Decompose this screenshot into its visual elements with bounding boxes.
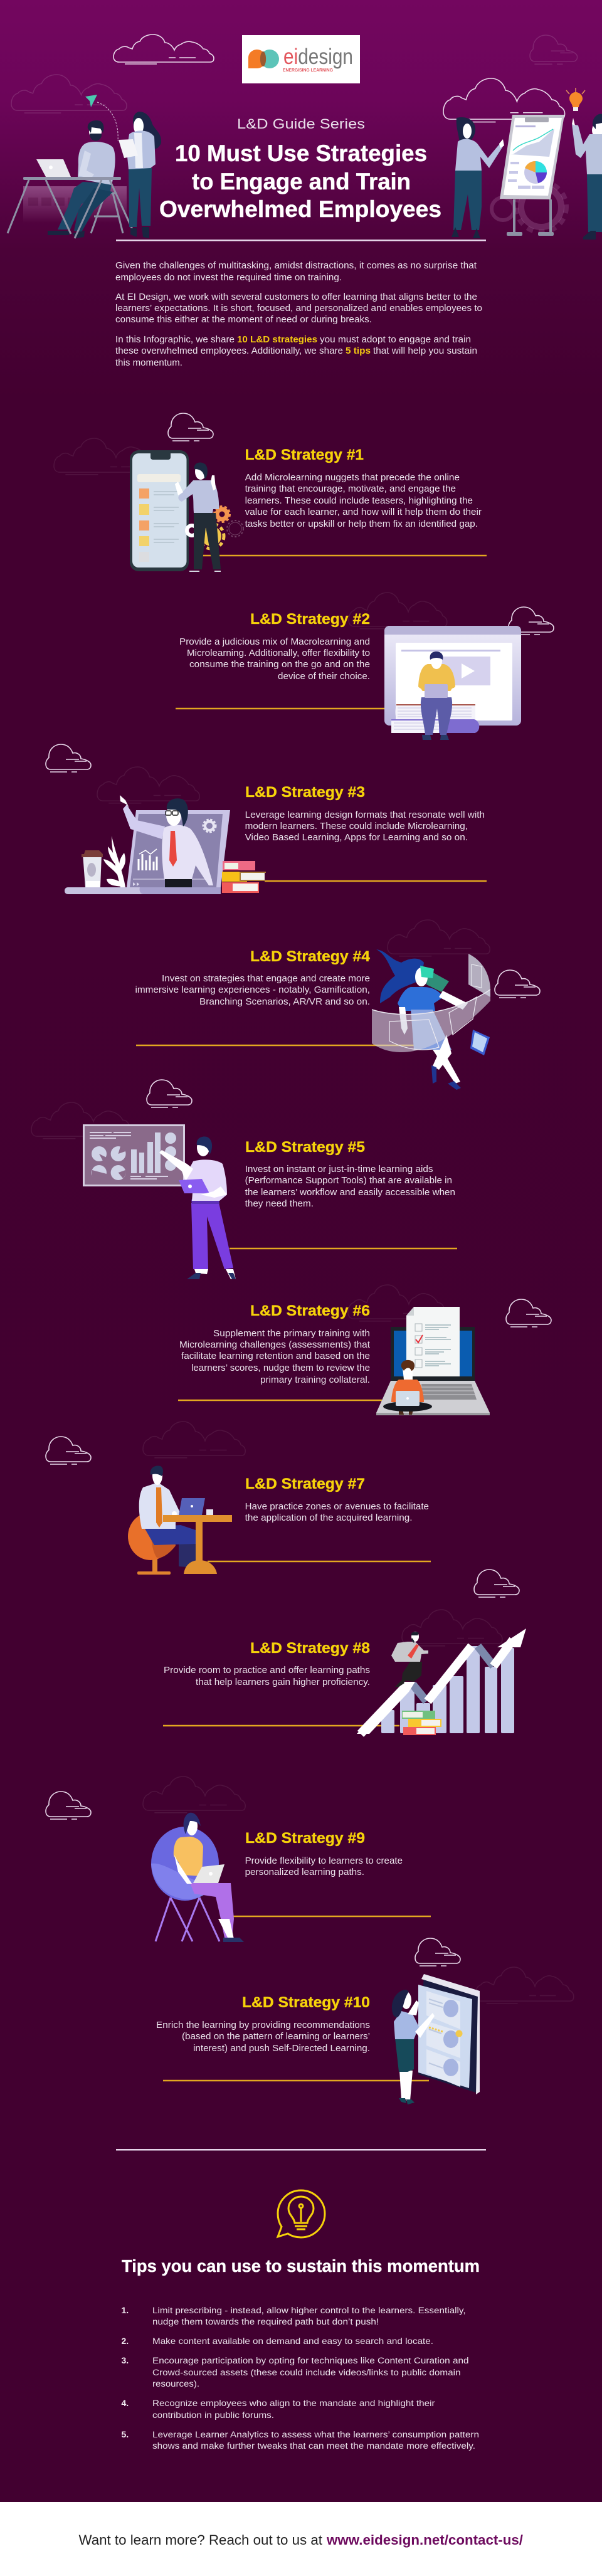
tip 1: 1.	[122, 2305, 129, 2315]
panel: strategy 7	[46, 1422, 431, 1575]
body text: interest) and push Self-Directed Learning.	[193, 2044, 370, 2054]
body text: Invest on strategies that engage and create more	[162, 974, 370, 984]
tip 5: shows and make further tweaks that can meet the mandate more effectively.	[152, 2441, 475, 2451]
panel: strategy 2	[176, 593, 554, 740]
title	[159, 140, 441, 222]
body text: (Performance Support Tools) that are available in	[245, 1176, 452, 1186]
tip 5: Leverage Learner Analytics to assess what the learners’ consumption pattern	[152, 2430, 479, 2439]
clouds	[54, 413, 213, 475]
footer text: www.eidesign.net/contact-us/	[326, 2532, 523, 2548]
heading: L&D Strategy #4	[250, 948, 371, 965]
footer text: Want to learn more? Reach out to us at	[79, 2532, 322, 2548]
body text: device of their choice.	[278, 672, 370, 682]
clouds	[31, 1080, 192, 1139]
tip 5: 5.	[122, 2429, 129, 2439]
intro text: 10 L&D strategies	[237, 335, 317, 345]
tip 5	[122, 2429, 479, 2451]
body text: that help learners gain higher proficiency.	[196, 1677, 370, 1687]
body text: they need them.	[245, 1199, 314, 1209]
panel: strategy 1	[54, 413, 487, 572]
tip 4: Recognize employees who align to the mandate and highlight their	[152, 2399, 435, 2408]
body text: Leverage learning design formats that resonate well with	[245, 810, 485, 820]
title: to Engage and Train	[192, 169, 411, 194]
body text	[179, 637, 370, 682]
body text: Provide room to practice and offer learning paths	[164, 1665, 370, 1676]
body text: Microlearning. Additionally, offer flexibility to	[187, 648, 370, 658]
tip 3	[122, 2355, 469, 2389]
panel: strategy 10	[156, 1938, 574, 2104]
intro text: In this Infographic, we share	[115, 335, 235, 345]
title: Overwhelmed Employees	[159, 196, 441, 222]
tip 2: Make content available on demand and easy to search and locate.	[152, 2336, 433, 2346]
illustration: man and woman at desk	[8, 95, 161, 238]
panel: strategy 8	[163, 1570, 526, 1735]
heading: L&D Strategy #6	[250, 1302, 370, 1319]
body text	[156, 2020, 370, 2054]
tip 1	[122, 2305, 466, 2326]
body text	[164, 1665, 370, 1687]
body text: tasks better or upskill or help them fix an identified gap.	[245, 519, 478, 529]
illustration: window with man on books	[384, 626, 521, 740]
illustration: man at table	[128, 1466, 232, 1575]
heading: L&D Strategy #2	[250, 611, 370, 628]
tip 1: Limit prescribing - instead, allow higher control to the learners. Essentially,	[152, 2306, 466, 2315]
body text: consume the training on the go and on the	[189, 660, 370, 670]
heading: L&D Strategy #3	[245, 784, 365, 801]
body text: Invest on instant or just-in-time learning aids	[245, 1164, 433, 1175]
heading: L&D Strategy #7	[245, 1475, 365, 1492]
heading: Tips you can use to sustain this momentum	[122, 2256, 480, 2276]
cloud: faded left	[11, 75, 127, 113]
tip 3: Crowd-sourced assets (these could include videos/links to public domain	[152, 2368, 461, 2377]
body text: learners. These could include teasers, highlighting the	[245, 496, 473, 506]
icon: light bulb speech bubble	[278, 2190, 325, 2237]
footer band	[0, 2502, 602, 2576]
body text	[245, 1164, 455, 1209]
intro text: learners’ expectations. It is short, focused, and personalized and enables employees to	[115, 304, 482, 314]
tip 3: resources).	[152, 2379, 199, 2389]
cloud: right	[443, 78, 565, 122]
intro text: that will help you sustain	[373, 346, 477, 356]
body text: value for each learner, and how will it help them do their	[245, 507, 482, 517]
body text	[245, 1856, 403, 1877]
heading: L&D Strategy #9	[245, 1830, 365, 1847]
intro text: you must adopt to engage and train	[320, 335, 471, 345]
body text: Add Microlearning nuggets that precede the online	[245, 473, 460, 483]
body text: facilitate learning retention and based on the	[181, 1351, 370, 1361]
body text: training that encourage, motivate, and engage the	[245, 484, 456, 494]
body text: Have practice zones or avenues to facilitate	[245, 1502, 429, 1512]
body text: the learners’ workflow and easily accessible when	[245, 1188, 455, 1198]
tip 4: 4.	[122, 2398, 129, 2408]
body text: Provide a judicious mix of Macrolearning and	[179, 637, 370, 647]
clouds	[46, 1776, 245, 1819]
logo: eidesign	[283, 45, 353, 69]
body text	[135, 974, 370, 1007]
panel: strategy 5	[31, 1080, 457, 1279]
intro text: this momentum.	[115, 358, 182, 368]
clouds	[388, 920, 540, 998]
title: 10 Must Use Strategies	[175, 140, 427, 166]
subtitle: L&D Guide Series	[237, 116, 365, 132]
intro text: At EI Design, we work with several customers to offer learning that aligns better to the	[115, 292, 477, 302]
panel: strategy 9	[46, 1776, 431, 1942]
intro text: 5 tips	[346, 346, 371, 356]
intro text	[115, 261, 482, 368]
body text: personalized learning paths.	[245, 1867, 364, 1877]
tip 2: 2.	[122, 2336, 129, 2346]
heading: L&D Strategy #1	[245, 446, 364, 463]
clouds	[348, 1285, 551, 1327]
body text	[245, 473, 482, 529]
illustration: woman in VR	[372, 949, 490, 1090]
tip 3: Encourage participation by opting for techniques like Content Curation and	[152, 2356, 469, 2365]
heading: L&D Strategy #5	[245, 1139, 365, 1156]
body text	[245, 810, 485, 843]
illustration: woman in chair	[151, 1813, 244, 1942]
body text	[179, 1329, 370, 1385]
body text: immersive learning experiences - notably, Gamification,	[135, 985, 370, 995]
header panel	[8, 34, 602, 241]
clouds	[402, 1570, 519, 1646]
illustration: growth chart and runner	[357, 1628, 526, 1735]
logo: ENERGISING LEARNING	[283, 67, 333, 73]
panel: strategy 4	[135, 920, 540, 1090]
illustration: flipchart presentation	[452, 88, 602, 240]
body text: Enrich the learning by providing recommendations	[156, 2020, 370, 2030]
panel: strategy 6	[178, 1285, 551, 1415]
body text: Provide flexibility to learners to create	[245, 1856, 403, 1866]
clouds	[46, 1422, 245, 1464]
body text: primary training collateral.	[260, 1375, 370, 1385]
illustration: dashboard and man	[84, 1125, 236, 1279]
intro text: consume this either at the moment of need or during breaks.	[115, 315, 372, 325]
clouds	[415, 1938, 574, 2003]
illustration: man in laptop	[65, 795, 266, 894]
footer text	[79, 2532, 523, 2548]
body text: learners’ scores, nudge them to review the	[191, 1363, 370, 1373]
body text: Branching Scenarios, AR/VR and so on.	[199, 997, 370, 1007]
body text: (based on the pattern of learning or learners’	[182, 2032, 370, 2042]
body text: Microlearning challenges (assessments) that	[179, 1340, 370, 1350]
cloud: faded right	[530, 35, 578, 64]
body text: Supplement the primary training with	[213, 1329, 370, 1339]
logo	[242, 35, 360, 83]
panel: strategy 3	[46, 744, 487, 894]
body text: modern learners. These could include Microlearning,	[245, 821, 468, 831]
tip 1: nudge them towards the required path but don’t push!	[152, 2317, 379, 2326]
tip 4	[122, 2398, 435, 2420]
tip 3: 3.	[122, 2355, 129, 2365]
panel: tips	[122, 2190, 480, 2451]
illustration: checklist on laptop	[376, 1307, 490, 1415]
heading: L&D Strategy #10	[242, 1994, 370, 2011]
clouds	[349, 593, 554, 635]
heading: L&D Strategy #8	[250, 1640, 370, 1657]
cloud: top left	[114, 34, 214, 64]
intro text: Given the challenges of multitasking, amidst distractions, it comes as no surprise that	[115, 261, 477, 271]
body text: Video Based Learning, Apps for Learning and so on.	[245, 833, 468, 843]
intro text: these overwhelmed employees. Additionally, we share	[115, 346, 343, 356]
clouds	[46, 744, 199, 803]
body text: the application of the acquired learning.	[245, 1513, 413, 1523]
illustration: phone and man	[130, 450, 243, 572]
tip 4: contribution in public forums.	[152, 2410, 274, 2420]
intro text: employees do not invest the required time on training.	[115, 273, 342, 283]
illustration: woman at big tablet	[392, 1974, 480, 2104]
body text	[245, 1502, 429, 1523]
